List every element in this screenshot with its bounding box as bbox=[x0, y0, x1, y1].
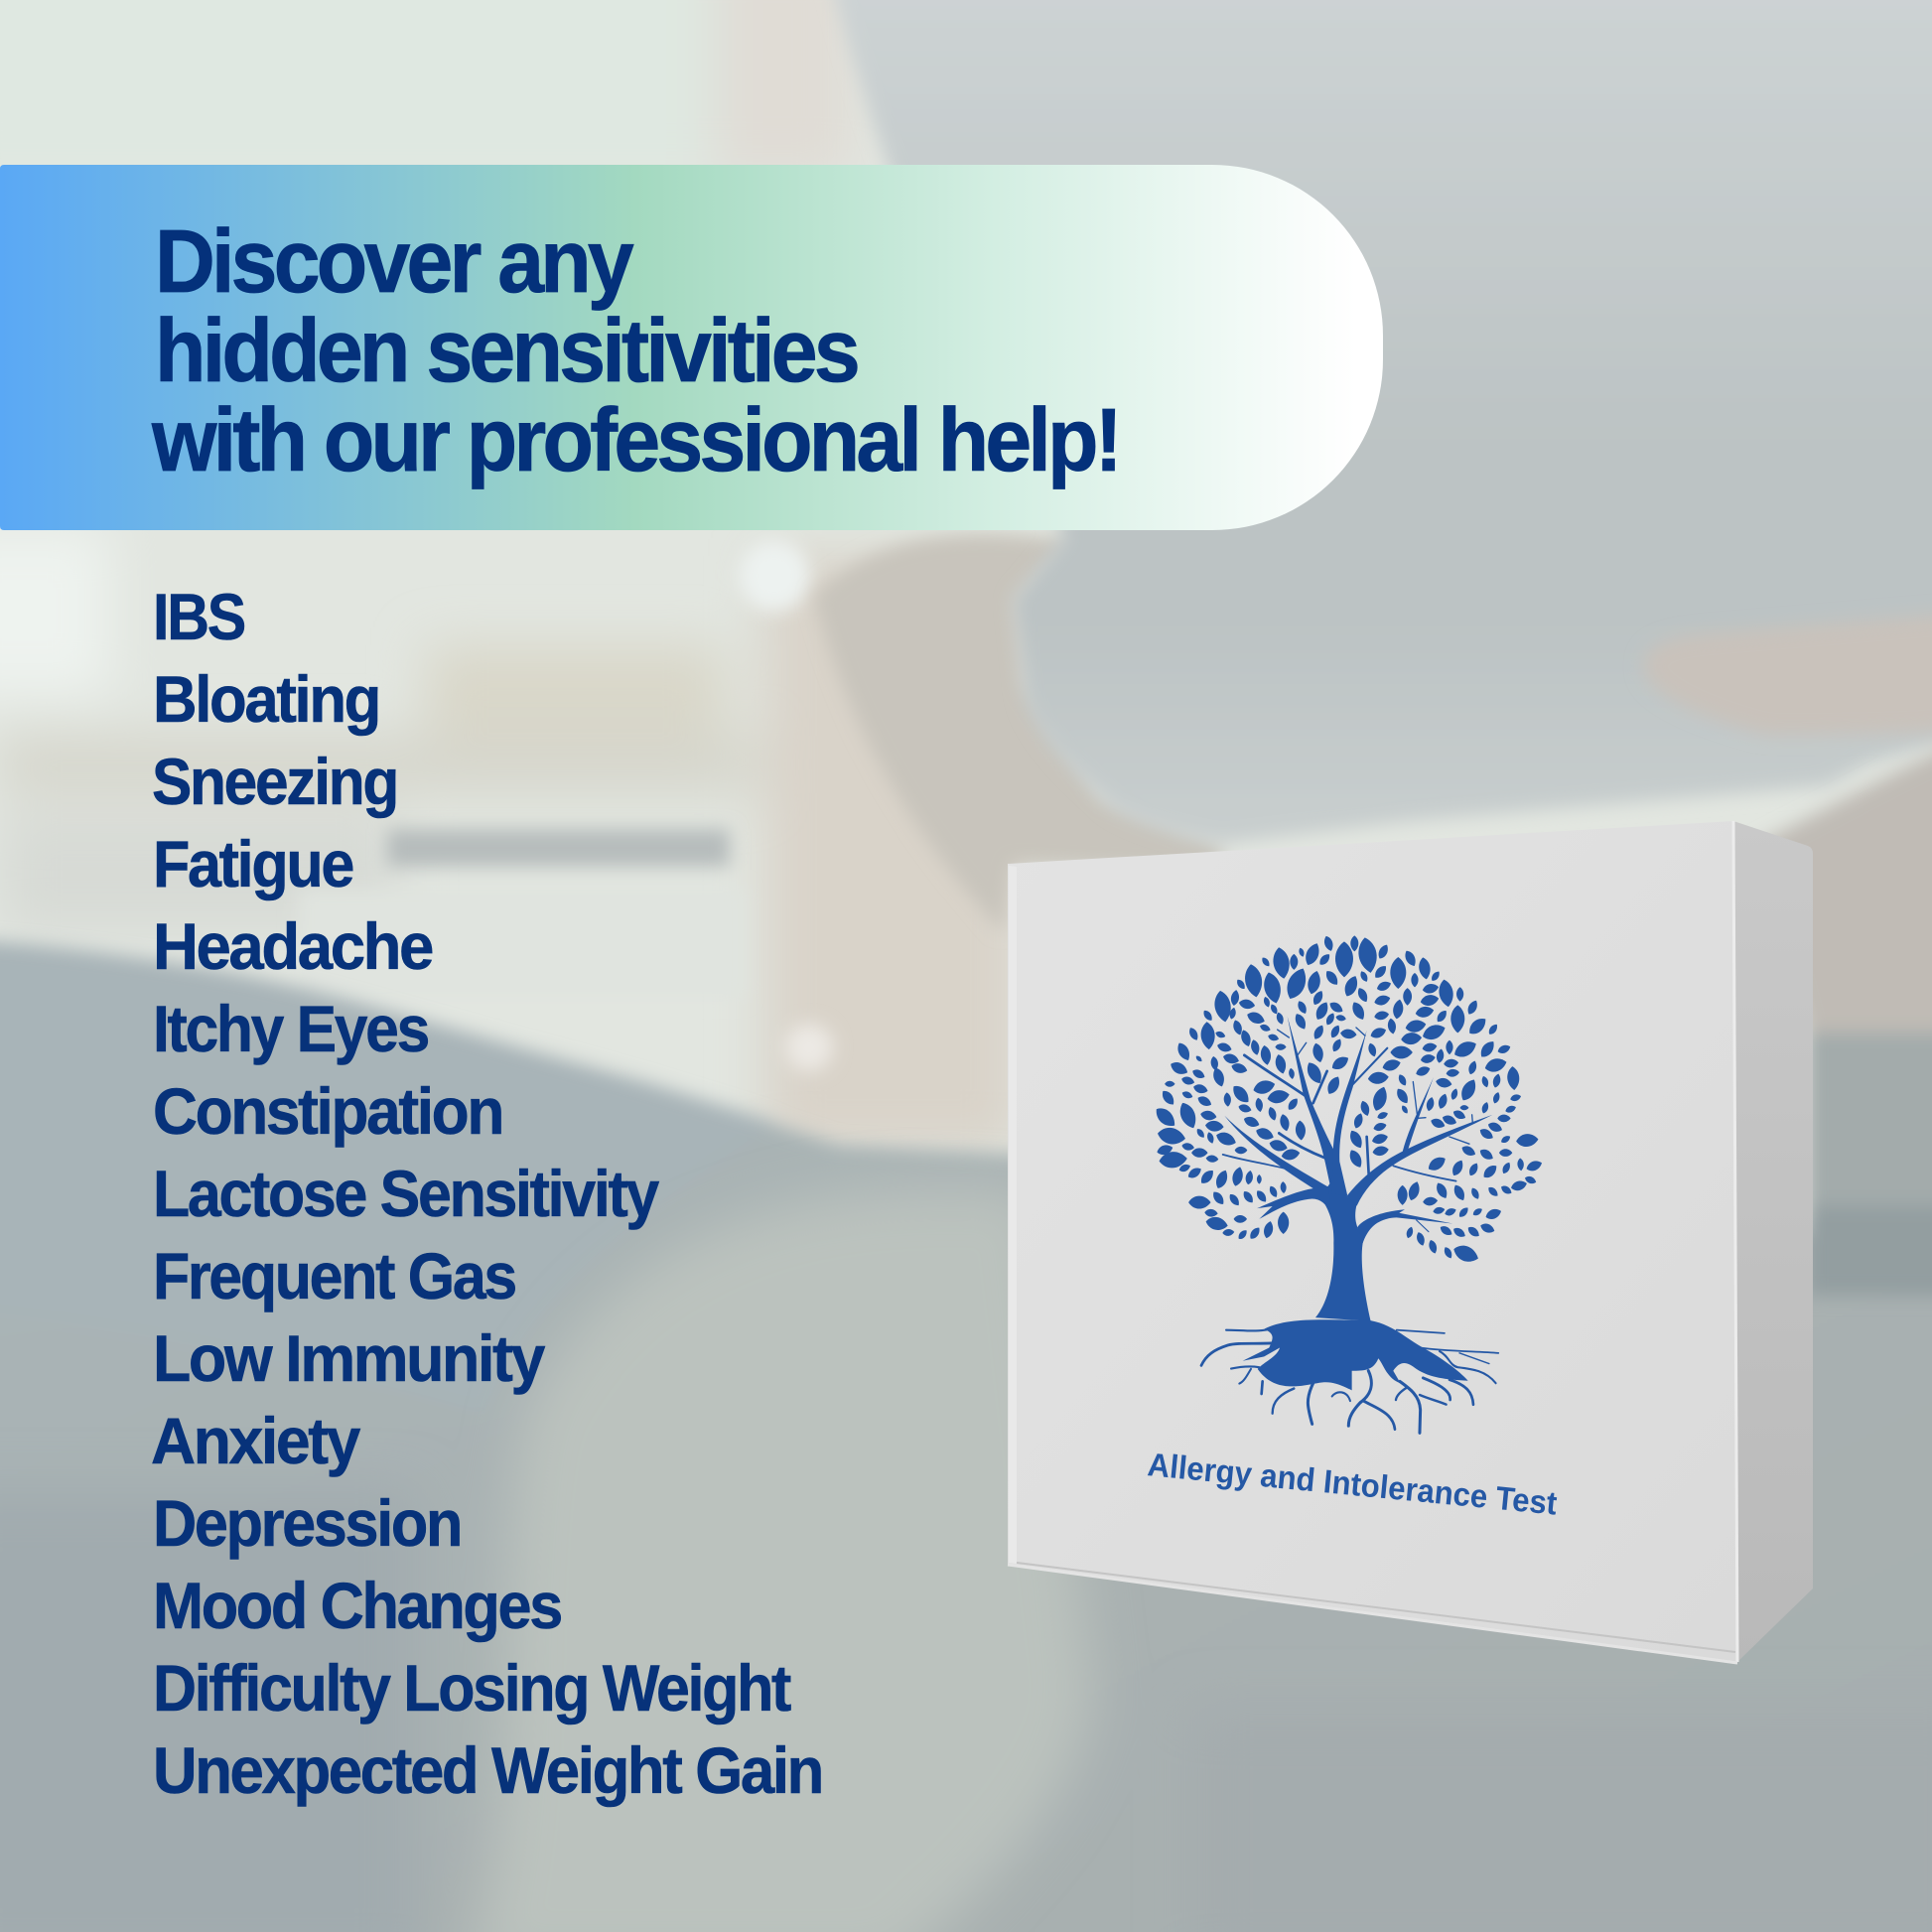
symptoms list: Depression bbox=[153, 1486, 461, 1560]
shirt bbox=[826, 0, 1932, 844]
symptoms list: Unexpected Weight Gain bbox=[153, 1733, 822, 1807]
symptoms list: Constipation bbox=[153, 1074, 502, 1148]
symptoms list: Fatigue bbox=[153, 827, 353, 900]
headline banner bbox=[0, 165, 1383, 530]
product box bbox=[1008, 821, 1813, 1663]
symptoms list: Sneezing bbox=[152, 745, 397, 818]
headline text: Discover any bbox=[155, 212, 634, 312]
tree logo bbox=[1153, 934, 1544, 1433]
box side bbox=[1733, 821, 1813, 1662]
hand right bbox=[1643, 611, 1932, 1296]
symptoms list: Frequent Gas bbox=[153, 1239, 515, 1312]
symptoms list: Bloating bbox=[153, 662, 379, 736]
symptoms list: Difficulty Losing Weight bbox=[153, 1651, 791, 1725]
box front bbox=[1008, 821, 1737, 1662]
hand left bbox=[814, 535, 1221, 933]
symptoms list: Itchy Eyes bbox=[153, 992, 428, 1065]
headline text: with our professional help! bbox=[151, 391, 1119, 490]
symptoms list: IBS bbox=[153, 580, 244, 653]
box label text: Allergy and Intolerance Test bbox=[1146, 1446, 1559, 1522]
symptoms list: Headache bbox=[153, 909, 433, 983]
headline text: hidden sensitivities bbox=[155, 302, 858, 401]
tree leaves bbox=[1153, 934, 1544, 1266]
jeans knee and lap bbox=[0, 938, 1932, 1932]
symptoms list: Mood Changes bbox=[153, 1569, 561, 1642]
headline text bbox=[151, 212, 1119, 490]
symptoms list: Low Immunity bbox=[153, 1321, 546, 1395]
tree roots bbox=[1201, 1319, 1498, 1433]
tree trunk and branches bbox=[1223, 1017, 1492, 1321]
symptoms list bbox=[151, 580, 822, 1807]
symptoms list: Lactose Sensitivity bbox=[153, 1157, 660, 1230]
symptoms list: Anxiety bbox=[151, 1404, 361, 1477]
